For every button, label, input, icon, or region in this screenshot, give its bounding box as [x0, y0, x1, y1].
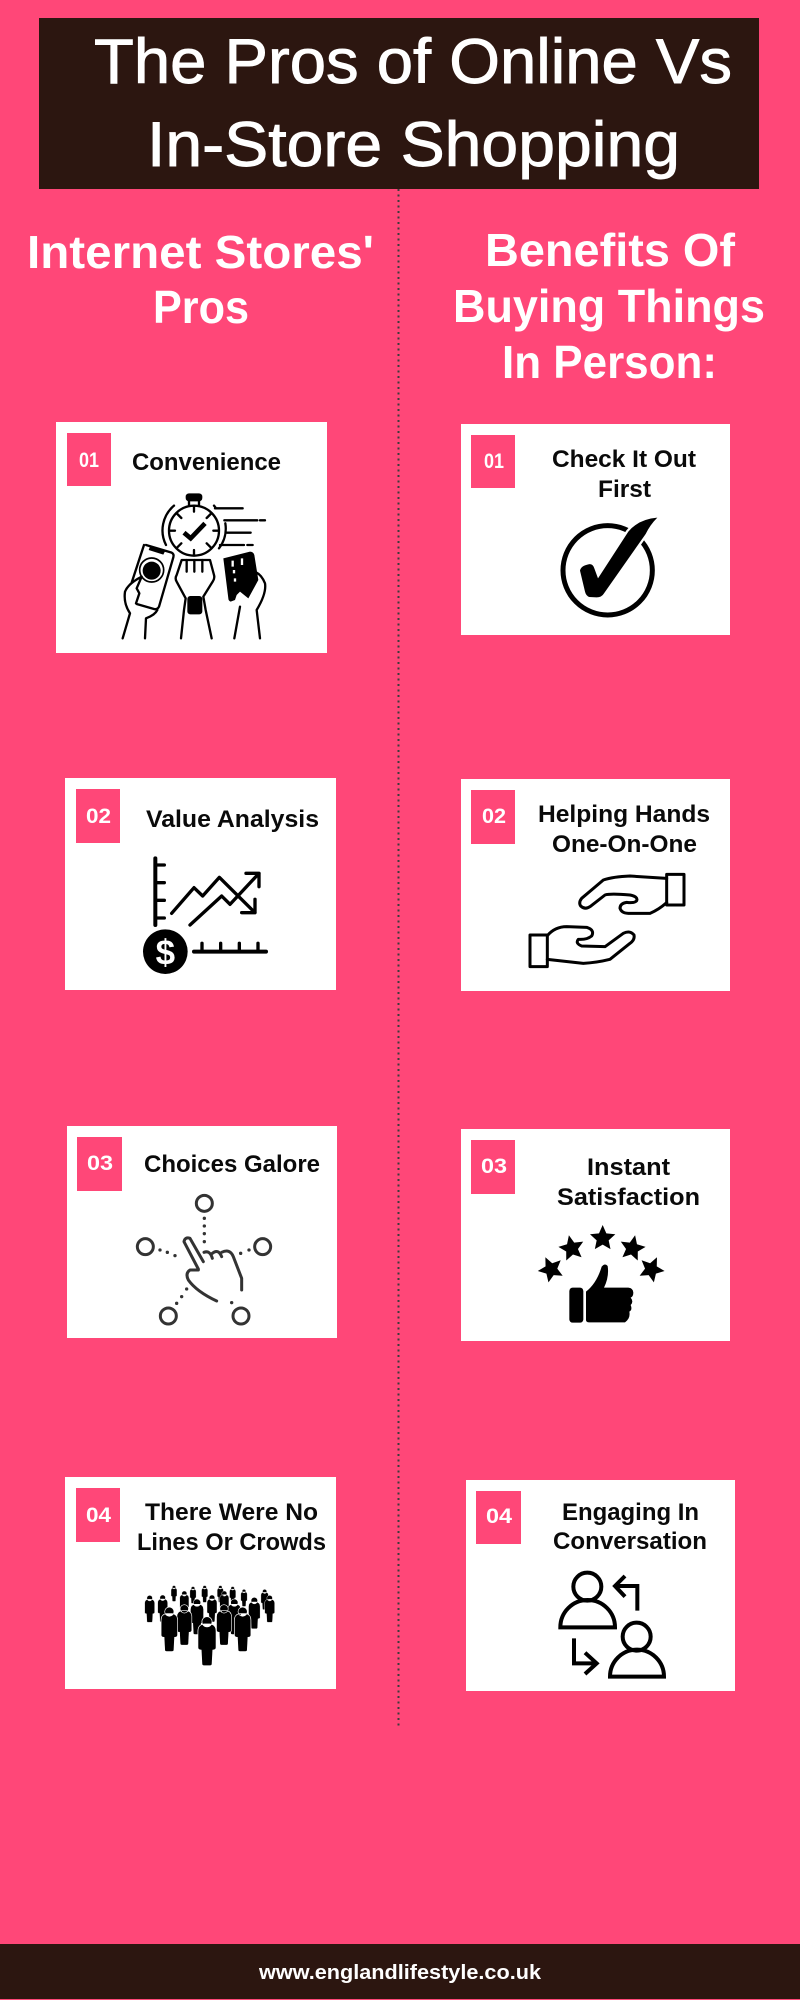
icon: stopwatch and hands [123, 493, 265, 638]
title banner: The Pros of Online Vs [94, 27, 732, 97]
heading: no lines or crowds: There Were No [145, 1499, 318, 1526]
heading: choices galore: Choices Galore [144, 1151, 320, 1178]
number badge 04 [476, 1491, 521, 1544]
number badge 01: 01 [484, 450, 504, 473]
icon: two people exchanging [560, 1573, 664, 1677]
panel: helping hands one-on-one [461, 779, 730, 991]
heading: no lines or crowds [137, 1499, 326, 1556]
heading: helping hands one-on-one: One-On-One [552, 831, 697, 858]
number badge 01 [67, 433, 111, 486]
title banner: In-Store Shopping [147, 110, 680, 180]
number badge 03 [471, 1140, 515, 1194]
footer bar: www.englandlifestyle.co.uk [258, 1962, 542, 1984]
heading: value analysis: Value Analysis [146, 806, 319, 833]
number badge 02 [76, 789, 120, 843]
heading: helping hands one-on-one [538, 801, 710, 858]
icon: chart with dollar: $ [156, 933, 175, 972]
panel: value analysis [65, 778, 336, 990]
number badge 03: 03 [481, 1155, 507, 1178]
number badge 04 [76, 1488, 120, 1542]
heading: engaging in conversation: Engaging In [562, 1499, 699, 1526]
heading: helping hands one-on-one: Helping Hands [538, 801, 710, 828]
panel: convenience [56, 422, 327, 653]
number badge 04: 04 [86, 1504, 111, 1527]
number badge 01 [471, 435, 515, 488]
heading: benefits of buying in person: Buying Things [453, 280, 765, 332]
heading: instant satisfaction [557, 1154, 700, 1211]
heading: benefits of buying in person: Benefits Of [485, 224, 736, 276]
icon: chart with dollar [143, 858, 266, 974]
number badge 03: 03 [87, 1152, 113, 1175]
heading: instant satisfaction: Instant [587, 1154, 670, 1181]
heading: benefits of buying in person [453, 224, 765, 388]
heading: check it out first: First [598, 476, 651, 503]
icon: pointing hand with options [137, 1195, 271, 1324]
icon: crowd of people [145, 1586, 275, 1666]
number badge 02: 02 [86, 805, 111, 828]
icon: thumbs up and five stars [534, 1225, 668, 1323]
number badge 04: 04 [486, 1505, 512, 1528]
heading: engaging in conversation: Conversation [553, 1528, 707, 1555]
icon: check mark in circle [563, 518, 657, 615]
heading: no lines or crowds: Lines Or Crowds [137, 1529, 326, 1556]
heading: check it out first: Check It Out [552, 446, 696, 473]
panel: engaging in conversation [466, 1480, 735, 1691]
number badge 03 [77, 1137, 122, 1191]
icon: helping hands [530, 874, 684, 967]
heading: engaging in conversation [553, 1499, 707, 1555]
heading: internet stores pros: Internet Stores' [27, 226, 374, 278]
number badge 01: 01 [79, 449, 99, 472]
panel: check it out first [461, 424, 730, 635]
heading: benefits of buying in person: In Person: [502, 336, 717, 388]
heading: internet stores pros [27, 226, 374, 333]
title banner [39, 18, 759, 189]
panel: choices galore [67, 1126, 337, 1338]
heading: convenience: Convenience [132, 449, 281, 476]
footer bar [0, 1944, 800, 1999]
number badge 02: 02 [482, 805, 506, 828]
number badge 02 [471, 790, 515, 844]
heading: internet stores pros: Pros [153, 281, 249, 333]
panel: no lines or crowds [65, 1477, 336, 1689]
heading: check it out first [552, 446, 696, 503]
heading: instant satisfaction: Satisfaction [557, 1184, 700, 1211]
panel: instant satisfaction [461, 1129, 730, 1341]
